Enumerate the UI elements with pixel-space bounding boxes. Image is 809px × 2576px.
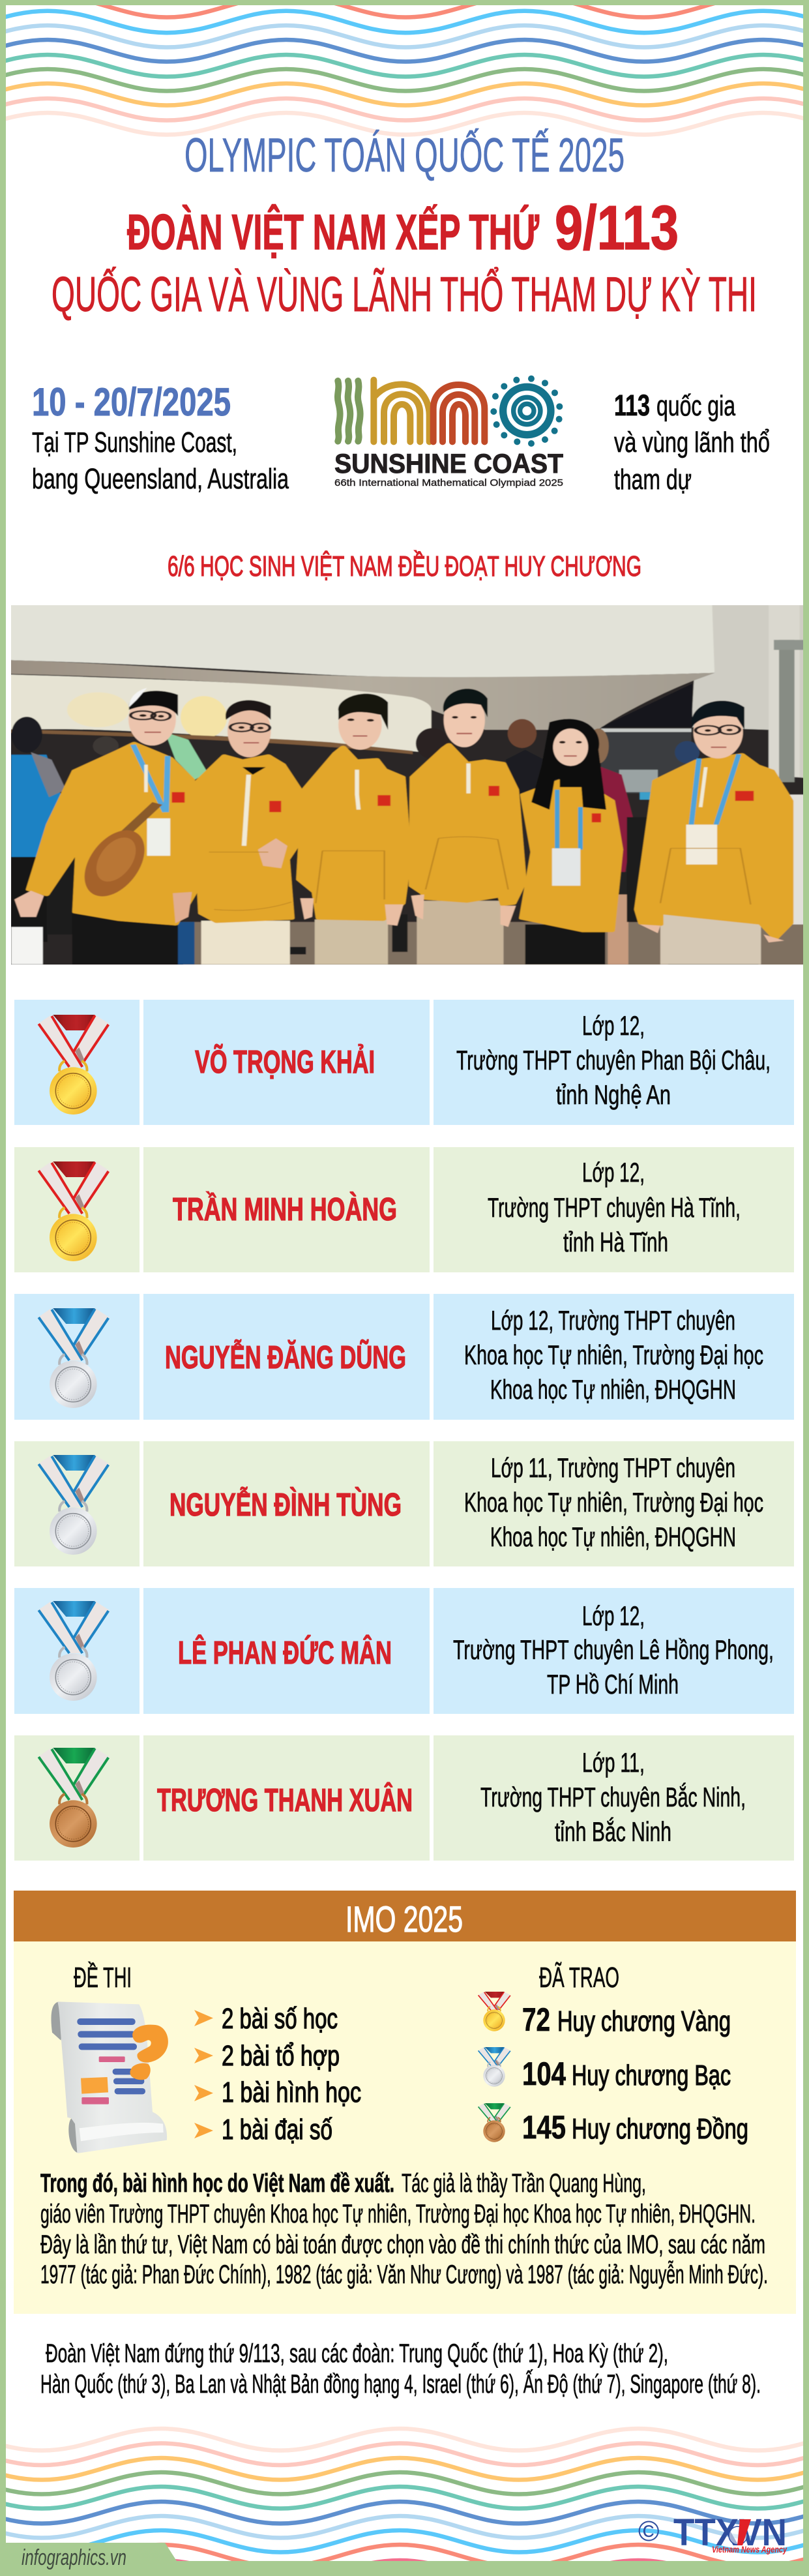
row 5: Lê Phan Đức Mân: LÊ PHAN ĐỨC MÂN [178, 1635, 392, 1671]
bronze medals count: 145 [522, 2109, 566, 2146]
person 2 [201, 921, 290, 965]
text: ranking summary [40, 2339, 761, 2399]
row 3: Nguyễn Đăng Dũng: NGUYỄN ĐĂNG DŨNG [165, 1340, 406, 1375]
IMO 2025 logo: SUNSHINE COAST [334, 448, 563, 479]
person 5 [525, 925, 605, 965]
row 3: Nguyễn Đăng Dũng [14, 1294, 794, 1420]
paragraph: geometry problem note [40, 2169, 768, 2289]
team photo [0, 600, 809, 969]
IMO 2025 header: IMO 2025 [346, 1898, 463, 1939]
row 5: Lê Phan Đức Mân: TP Hồ Chí Minh [547, 1669, 679, 1700]
bronze medals count [478, 2103, 748, 2146]
person 4 [417, 901, 503, 965]
paragraph: geometry problem note: Trong đó, bài hình học do Việt Nam đề xuất. [40, 2169, 394, 2198]
bronze medals count: Huy chương Đồng [572, 2113, 748, 2145]
IMO 2025 logo: 66th International Mathematical Olympiad 2025 [334, 478, 563, 488]
row 1: Võ Trọng Khải: tỉnh Nghệ An [556, 1079, 671, 1110]
participants count: 113 [614, 389, 650, 422]
top wave decoration [0, 0, 809, 134]
row 5: Lê Phan Đức Mân [14, 1588, 794, 1714]
silver medals count [478, 2047, 731, 2092]
row 1: Võ Trọng Khải: VÕ TRỌNG KHẢI [195, 1044, 375, 1080]
heading: exam: ĐỀ THI [74, 1961, 132, 1994]
row 2: Trần Minh Hoàng: Lớp 12, [582, 1157, 645, 1188]
participants count: tham dự [614, 464, 692, 496]
person 6 [660, 913, 761, 965]
gold medals count: Huy chương Vàng [557, 2005, 731, 2037]
gold medals count: 72 [522, 2001, 550, 2038]
silver medals count: 104 [522, 2056, 566, 2092]
IMO 2025 logo [334, 376, 563, 488]
date and location: Tại TP Sunshine Coast, [32, 427, 237, 458]
row 4: Nguyễn Đình Tùng: NGUYỄN ĐÌNH TÙNG [169, 1487, 402, 1523]
row 6: Trương Thanh Xuân: tỉnh Bắc Ninh [555, 1816, 671, 1847]
row 6: Trương Thanh Xuân: Lớp 11, [582, 1747, 645, 1778]
row 2: Trần Minh Hoàng: tỉnh Hà Tĩnh [563, 1227, 668, 1257]
bottom wave decoration [0, 2429, 809, 2576]
IMO 2025 header [14, 1891, 796, 1941]
gold medals count [478, 1992, 731, 2038]
logo: TTXVN: Vietnam News Agency [712, 2544, 787, 2554]
list: exam problems: 1 bài hình học [222, 2076, 361, 2108]
date and location: bang Queensland, Australia [32, 463, 289, 495]
person 1 [72, 914, 178, 965]
heading: awarded: ĐÃ TRAO [539, 1961, 619, 1994]
silver medals count: Huy chương Bạc [572, 2059, 731, 2091]
date and location [32, 380, 289, 495]
list: exam problems [194, 2003, 361, 2146]
row 1: Võ Trọng Khải [14, 1000, 794, 1125]
list: exam problems: 2 bài số học [222, 2003, 338, 2035]
list: exam problems: 1 bài đại số [222, 2114, 332, 2146]
participants count [614, 389, 770, 496]
title: 9/113 [555, 193, 679, 263]
participants count: quốc gia [656, 390, 735, 422]
logo: TTXVN: TTXVN [673, 2511, 787, 2554]
person 3 [315, 920, 388, 965]
title: ĐOÀN VIỆT NAM XẾP THỨ [127, 204, 540, 260]
panel: IMO 2025 [14, 1891, 796, 2314]
row 1: Võ Trọng Khải: Lớp 12, [582, 1010, 645, 1041]
list: exam problems: 2 bài tổ hợp [222, 2040, 340, 2072]
white shopping bag [11, 927, 43, 965]
row 2: Trần Minh Hoàng: TRẦN MINH HOÀNG [173, 1192, 397, 1227]
row 6: Trương Thanh Xuân [14, 1735, 794, 1861]
logo: TTXVN: © [638, 2515, 659, 2547]
row 5: Lê Phan Đức Mân: Lớp 12, [582, 1600, 645, 1631]
date and location: 10 - 20/7/2025 [32, 380, 231, 424]
title [51, 128, 757, 322]
icon: exam scroll [51, 2001, 168, 2153]
paragraph: geometry problem note: Tác giả là thầy Trần Quang Hùng, [402, 2169, 646, 2198]
row 2: Trần Minh Hoàng [14, 1147, 794, 1272]
background people [11, 717, 42, 753]
footer tab: infographics.vn [22, 2545, 126, 2570]
row 6: Trương Thanh Xuân: TRƯƠNG THANH XUÂN [157, 1782, 413, 1818]
row 4: Nguyễn Đình Tùng [14, 1441, 794, 1566]
